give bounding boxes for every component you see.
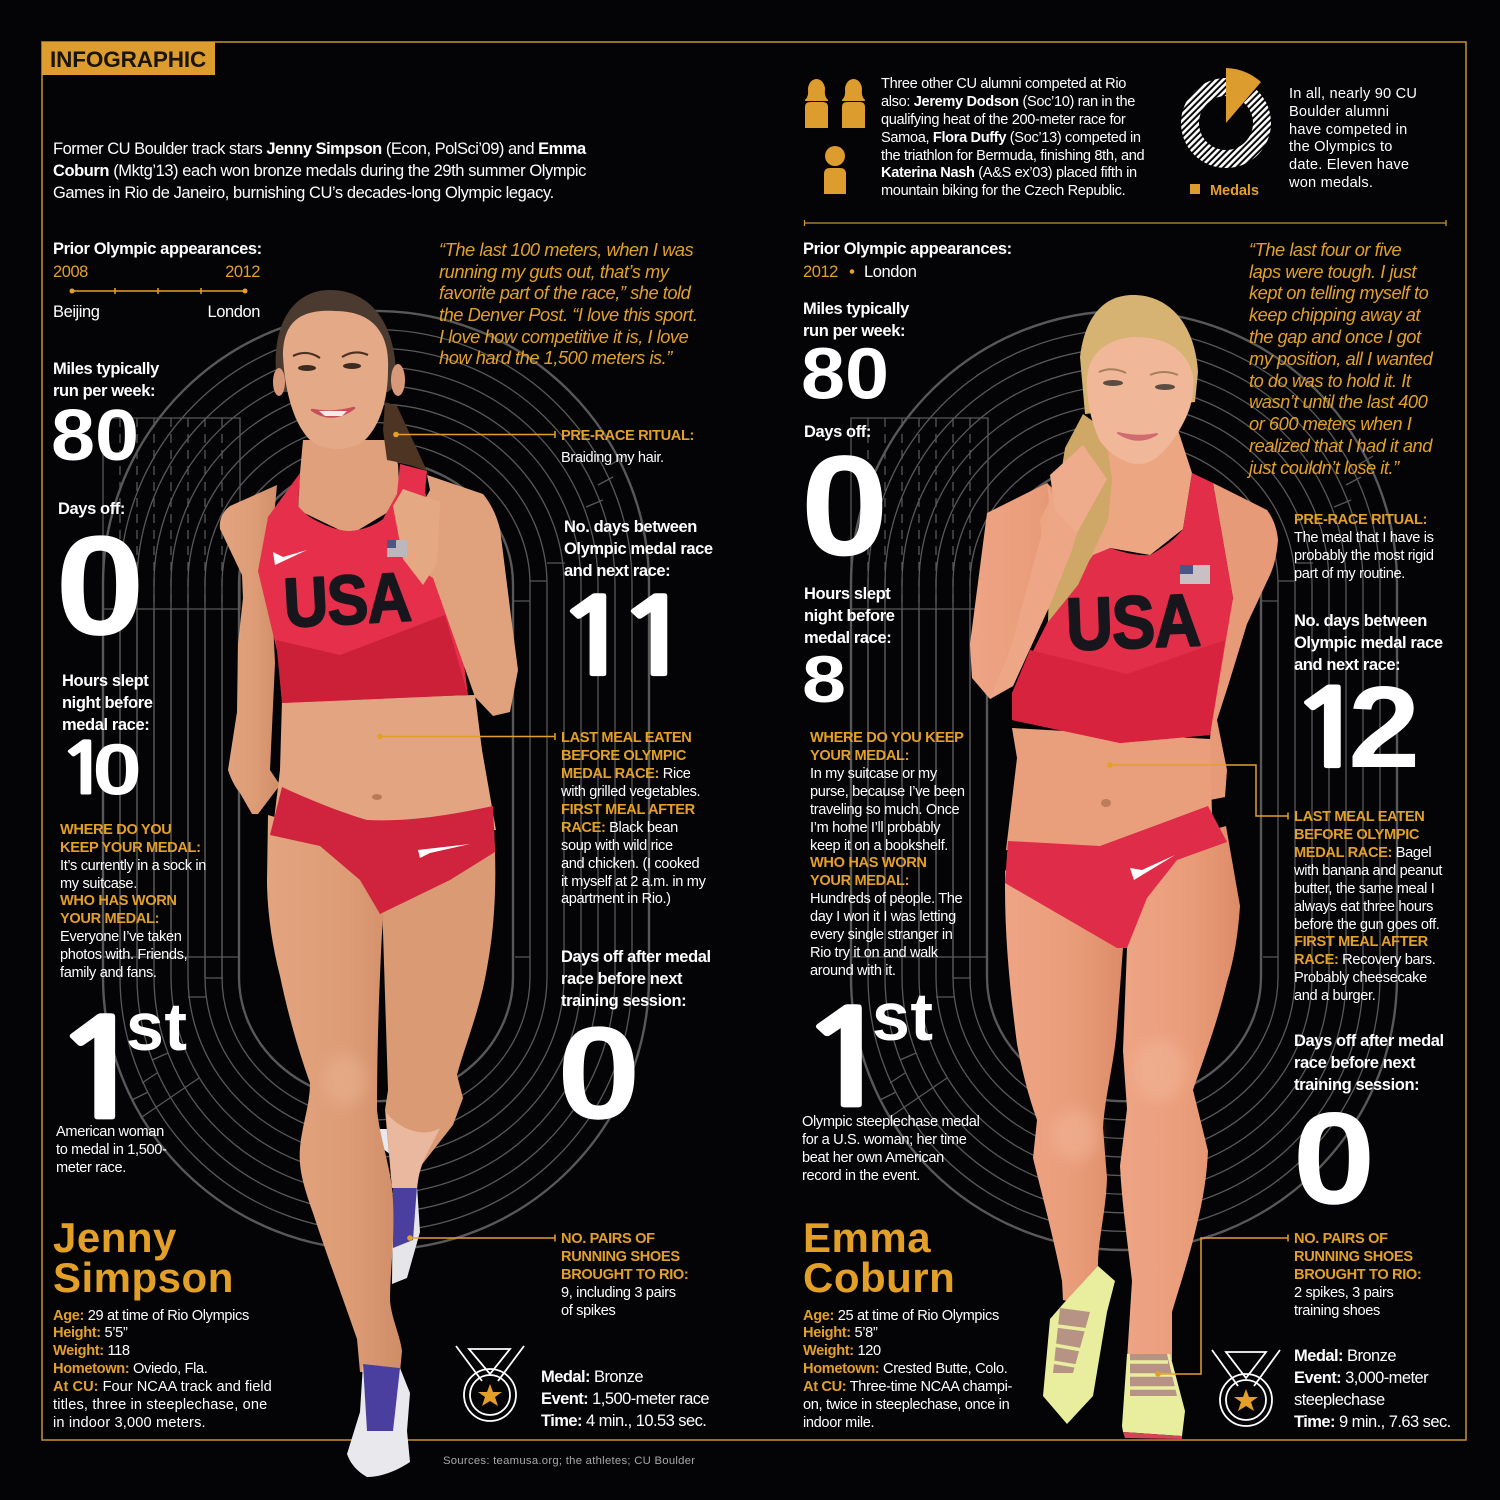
- callout: Emma last meal: always eat three hours: [1294, 899, 1433, 915]
- callout: Jenny running shoes: BROUGHT TO RIO:: [561, 1267, 688, 1283]
- where do you keep your medal: YOUR MEDAL:: [60, 911, 159, 927]
- first steeplechase medal: record in the event.: [802, 1168, 920, 1184]
- miles per week: 80: [801, 334, 889, 415]
- infographic tag: [42, 42, 215, 75]
- prior appearances: 2008: [53, 263, 88, 281]
- bio: Hometown: Crested Butte, Colo.: [803, 1361, 1007, 1377]
- quote: Jenny: “The last 100 meters, when I was: [439, 239, 694, 260]
- stat: days between races: No. days between: [564, 518, 697, 536]
- callout: Emma last meal: BEFORE OLYMPIC: [1294, 827, 1420, 843]
- stat: days between races: and next race:: [564, 562, 670, 580]
- where do you keep your medal: KEEP YOUR MEDAL:: [60, 840, 201, 856]
- quote: Emma: kept on telling myself to: [1249, 282, 1429, 303]
- text: three other alumni: Three other CU alumni competed at Rio: [881, 76, 1126, 92]
- stat: days between races: No. days between: [1294, 612, 1427, 630]
- quote: Emma: realized that I had it and: [1249, 435, 1433, 456]
- first steeplechase medal: 1: [795, 994, 900, 1126]
- bio: in indoor 3,000 meters.: [53, 1415, 206, 1431]
- name: Jenny Simpson: Simpson: [53, 1254, 234, 1301]
- medal details: Emma: Time: 9 min., 7.63 sec.: [1294, 1413, 1451, 1431]
- callout: Emma last meal: and a burger.: [1294, 988, 1375, 1004]
- name: Emma Coburn: Emma: [803, 1214, 931, 1261]
- callout: Jenny pre-race ritual: PRE-RACE RITUAL:: [561, 428, 694, 444]
- callout: Jenny last meal: it myself at 2 a.m. in my: [561, 874, 707, 890]
- bio: Age: 25 at time of Rio Olympics: [803, 1308, 999, 1324]
- hours slept: [57, 672, 153, 811]
- miles per week: [51, 360, 160, 476]
- first American woman: American woman: [56, 1124, 164, 1140]
- text: three other alumni: qualifying heat of the 200-meter race for: [881, 112, 1126, 128]
- where do you keep your medal: WHO HAS WORN: [60, 893, 177, 909]
- where do you keep your medal: around with it.: [810, 963, 896, 979]
- callout: Emma running shoes: [1155, 1231, 1425, 1377]
- where do you keep your medal: purse, because I’ve been: [810, 784, 965, 800]
- callout: Emma running shoes: BROUGHT TO RIO:: [1294, 1267, 1421, 1283]
- hours slept: night before: [804, 607, 895, 625]
- icon: medal, Emma: [1212, 1350, 1280, 1426]
- callout: Emma last meal: LAST MEAL EATEN: [1294, 809, 1424, 825]
- stat: days off after race: 0: [557, 999, 641, 1146]
- donut chart: medals share: [1181, 68, 1271, 199]
- where do you keep your medal: my suitcase.: [60, 876, 137, 892]
- callout: Jenny last meal: soup with wild rice: [561, 838, 673, 854]
- callout: Emma last meal: RACE: Recovery bars.: [1294, 952, 1435, 968]
- text: three other alumni: Katerina Nash (A&S ex’03) placed fifth in: [881, 165, 1137, 181]
- quote: Emma: keep chipping away at: [1249, 304, 1421, 325]
- text: all alumni: Boulder alumni: [1289, 104, 1389, 120]
- callout: Jenny running shoes: [407, 1231, 692, 1319]
- where do you keep your medal: every single stranger in: [810, 927, 953, 943]
- track diagram: Jenny: [103, 311, 649, 1250]
- first steeplechase medal: for a U.S. woman; her time: [802, 1132, 967, 1148]
- bio: At CU: Four NCAA track and field: [53, 1379, 272, 1395]
- stat: days between races: 1: [553, 586, 637, 691]
- callout: Jenny last meal: and chicken. (I cooked: [561, 856, 700, 872]
- stat: days off after race: [1292, 1032, 1444, 1231]
- stat: days between races: 1: [614, 586, 698, 691]
- bio: At CU: Three-time NCAA champi-: [803, 1379, 1012, 1395]
- prior appearances: London: [208, 303, 260, 321]
- days off: 0: [55, 507, 145, 665]
- where do you keep your medal: YOUR MEDAL:: [810, 748, 909, 764]
- text: all alumni: In all, nearly 90 CU: [1289, 86, 1417, 102]
- first steeplechase medal: beat her own American: [802, 1150, 944, 1166]
- callout: Jenny last meal: BEFORE OLYMPIC: [561, 748, 687, 764]
- quote: Jenny: how hard the 1,500 meters is.”: [439, 347, 673, 368]
- prior appearances: 2012: [803, 263, 838, 281]
- quote: Jenny: I love how competitive it is, I love: [439, 326, 689, 347]
- days off: Days off:: [58, 500, 125, 518]
- stat: days off after race: race before next: [561, 970, 683, 988]
- days off: 0: [800, 426, 889, 586]
- prior appearances: London: [864, 263, 917, 281]
- intro text: Former CU Boulder track stars Jenny Simpson (Econ, PolSci’09) and Emma: [53, 140, 586, 158]
- where do you keep your medal: WHERE DO YOU KEEP: [810, 730, 964, 746]
- stat: days off after race: training session:: [1294, 1076, 1419, 1094]
- callout: Emma pre-race ritual: probably the most rigid: [1294, 548, 1434, 564]
- callout: Emma running shoes: RUNNING SHOES: [1294, 1249, 1413, 1265]
- bio: titles, three in steeplechase, one: [53, 1397, 267, 1413]
- prior appearances: [803, 240, 1012, 281]
- name: Emma Coburn: Coburn: [803, 1254, 955, 1301]
- text: three other alumni: the triathlon for Bermuda, finishing 8th, and: [881, 148, 1145, 164]
- callout: Jenny running shoes: NO. PAIRS OF: [561, 1231, 655, 1247]
- hours slept: 1: [57, 734, 111, 805]
- bio: indoor mile.: [803, 1415, 874, 1431]
- first steeplechase medal: st: [872, 979, 933, 1055]
- hours slept: 0: [92, 730, 142, 811]
- callout: Jenny last meal: [377, 730, 709, 907]
- jersey lettering: USA: USA: [282, 558, 412, 642]
- jersey lettering: USA: USA: [1065, 578, 1201, 666]
- bio: Weight: 120: [803, 1343, 881, 1359]
- callout: Jenny last meal: MEDAL RACE: Rice: [561, 766, 691, 782]
- text: three other alumni: mountain biking for the Czech Republic.: [881, 183, 1125, 199]
- text: all alumni: the Olympics to: [1289, 139, 1393, 155]
- quote: Emma: the gap and once I got: [1249, 326, 1422, 347]
- stat: days between races: [1287, 612, 1443, 792]
- medal details: Jenny: Event: 1,500-meter race: [541, 1390, 709, 1408]
- where do you keep your medal: photos with. Friends,: [60, 947, 187, 963]
- first American woman: meter race.: [56, 1160, 126, 1176]
- stat: days off after race: training session:: [561, 992, 686, 1010]
- prior appearances: Prior Olympic appearances:: [53, 240, 262, 258]
- first American woman: 1: [49, 1004, 153, 1139]
- callout: Emma running shoes: training shoes: [1294, 1303, 1380, 1319]
- quote: Emma: just couldn’t lose it.”: [1246, 457, 1400, 478]
- bio: Age: 29 at time of Rio Olympics: [53, 1308, 249, 1324]
- where do you keep your medal: keep it on a bookshelf.: [810, 838, 948, 854]
- stat: days off after race: Days off after medal: [1294, 1032, 1444, 1050]
- medal details: Jenny: Medal: Bronze: [541, 1368, 643, 1386]
- callout: Jenny running shoes: 9, including 3 pairs: [561, 1285, 676, 1301]
- callout: Jenny last meal: RACE: Black bean: [561, 820, 678, 836]
- icon: medal, Jenny: [456, 1346, 524, 1421]
- where do you keep your medal: YOUR MEDAL:: [810, 873, 909, 889]
- hours slept: 8: [802, 643, 846, 716]
- callout: Jenny last meal: FIRST MEAL AFTER: [561, 802, 696, 818]
- callout: Emma running shoes: NO. PAIRS OF: [1294, 1231, 1388, 1247]
- stat: days off after race: Days off after medal: [561, 948, 711, 966]
- bio: Weight: 118: [53, 1343, 130, 1359]
- stat: days between races: 1: [1287, 676, 1371, 783]
- where do you keep your medal: traveling so much. Once: [810, 802, 960, 818]
- days off: Days off:: [804, 423, 871, 441]
- miles per week: Miles typically: [803, 300, 910, 318]
- medal details: Jenny: Time: 4 min., 10.53 sec.: [541, 1412, 706, 1430]
- stat: days off after race: [557, 948, 711, 1146]
- medal details: Emma: steeplechase: [1294, 1391, 1385, 1409]
- bio: Height: 5’5”: [53, 1325, 127, 1341]
- callout: Emma last meal: Probably cheesecake: [1294, 970, 1427, 986]
- callout: Jenny running shoes: of spikes: [561, 1303, 615, 1319]
- where do you keep your medal: I’m home I’ll probably: [810, 820, 941, 836]
- callout: Emma last meal: before the gun goes off.: [1294, 917, 1440, 933]
- quote: Emma: wasn’t until the last 400: [1249, 391, 1429, 412]
- where do you keep your medal: WHERE DO YOU: [60, 822, 171, 838]
- quote: Emma: laps were tough. I just: [1249, 261, 1417, 282]
- hours slept: medal race:: [62, 716, 149, 734]
- miles per week: run per week:: [803, 322, 905, 340]
- hours slept: night before: [62, 694, 153, 712]
- first steeplechase medal: Olympic steeplechase medal: [802, 1114, 980, 1130]
- first American woman: [49, 989, 187, 1176]
- stat: days between races: and next race:: [1294, 656, 1400, 674]
- callout: Jenny pre-race ritual: [393, 428, 694, 466]
- hours slept: Hours slept: [804, 585, 891, 603]
- quote: Emma: “The last four or five: [1249, 239, 1402, 260]
- prior appearances: 2012: [225, 263, 260, 281]
- text: all alumni: date. Eleven have: [1289, 157, 1409, 173]
- text: three other alumni: Samoa, Flora Duffy (Soc’13) competed in: [881, 130, 1141, 146]
- text: all alumni: have competed in: [1289, 122, 1407, 138]
- callout: Jenny last meal: LAST MEAL EATEN: [561, 730, 691, 746]
- medal details: Emma: Medal: Bronze: [1294, 1347, 1396, 1365]
- callout: Emma pre-race ritual: The meal that I have is: [1294, 530, 1434, 546]
- bio: Height: 5’8”: [803, 1325, 877, 1341]
- text: three other alumni: also: Jeremy Dodson (Soc’10) ran in the: [881, 94, 1135, 110]
- miles per week: [801, 300, 910, 415]
- sources: Sources: teamusa.org; the athletes; CU Boulder: [443, 1455, 695, 1467]
- stat: days off after race: 0: [1292, 1085, 1376, 1231]
- where do you keep your medal: family and fans.: [60, 965, 157, 981]
- first steeplechase medal: [795, 979, 980, 1184]
- miles per week: 80: [51, 395, 139, 476]
- where do you keep your medal: It’s currently in a sock in: [60, 858, 206, 874]
- where do you keep your medal: Hundreds of people. The: [810, 891, 963, 907]
- bio: Hometown: Oviedo, Fla.: [53, 1361, 207, 1377]
- text: all alumni: won medals.: [1288, 175, 1373, 191]
- where do you keep your medal: Everyone I’ve taken: [60, 929, 182, 945]
- intro text: Games in Rio de Janeiro, burnishing CU’s decades-long Olympic legacy.: [53, 184, 554, 202]
- callout: Emma last meal: [1107, 762, 1446, 1004]
- intro text: Coburn (Mktg’13) each won bronze medals during the 29th summer Olympic: [53, 162, 586, 180]
- where do you keep your medal: day I won it I was letting: [810, 909, 956, 925]
- athlete photo: Emma Coburn: [970, 295, 1278, 1439]
- prior appearances: Prior Olympic appearances:: [803, 240, 1012, 258]
- callout: Emma pre-race ritual: PRE-RACE RITUAL:: [1294, 512, 1427, 528]
- hours slept: [802, 585, 895, 716]
- first American woman: st: [126, 989, 187, 1065]
- callout: Emma last meal: FIRST MEAL AFTER: [1294, 934, 1429, 950]
- callout: Emma last meal: butter, the same meal I: [1294, 881, 1434, 897]
- stat: days between races: [553, 518, 713, 691]
- quote: Emma: or 600 meters when I: [1249, 413, 1412, 434]
- prior appearances: [53, 240, 262, 321]
- where do you keep your medal: WHO HAS WORN: [810, 855, 927, 871]
- bio: on, twice in steeplechase, once in: [803, 1397, 1010, 1413]
- quote: Emma: to do was to hold it. It: [1249, 370, 1412, 391]
- where do you keep your medal: Rio try it on and walk: [810, 945, 939, 961]
- callout: Jenny pre-race ritual: Braiding my hair.: [561, 450, 664, 466]
- track diagram: Emma: [851, 311, 1397, 1250]
- infographic tag: INFOGRAPHIC: [50, 47, 206, 72]
- callout: Emma last meal: with banana and peanut: [1293, 863, 1442, 879]
- callout: Emma last meal: MEDAL RACE: Bagel: [1294, 845, 1431, 861]
- stat: days between races: 2: [1348, 663, 1420, 792]
- athlete photo: Jenny Simpson: [220, 290, 518, 1477]
- callout: Jenny running shoes: RUNNING SHOES: [561, 1249, 680, 1265]
- callout: Emma pre-race ritual: part of my routine.: [1294, 566, 1405, 582]
- prior appearances: Beijing: [53, 303, 100, 321]
- stat: days between races: Olympic medal race: [564, 540, 713, 558]
- panel: Emma Coburn stats: [795, 240, 1016, 1431]
- where do you keep your medal: In my suitcase or my: [810, 766, 938, 782]
- first American woman: to medal in 1,500-: [56, 1142, 167, 1158]
- icon group: three alumni: [805, 79, 865, 194]
- medal details: Emma: Event: 3,000-meter: [1294, 1369, 1428, 1387]
- panel: Jenny Simpson stats: [49, 240, 276, 1431]
- hours slept: medal race:: [804, 629, 891, 647]
- quote: Jenny: running my guts out, that’s my: [439, 261, 671, 282]
- stat: days off after race: race before next: [1294, 1054, 1416, 1072]
- callout: Jenny last meal: apartment in Rio.): [561, 891, 671, 907]
- miles per week: Miles typically: [53, 360, 160, 378]
- callout: Jenny last meal: with grilled vegetables.: [560, 784, 700, 800]
- donut chart: medals share: Medals: [1210, 183, 1259, 199]
- miles per week: run per week:: [53, 382, 155, 400]
- stat: days between races: Olympic medal race: [1294, 634, 1443, 652]
- name: Jenny Simpson: Jenny: [53, 1214, 177, 1261]
- hours slept: Hours slept: [62, 672, 149, 690]
- quote: Jenny: favorite part of the race,” she told: [439, 282, 692, 303]
- callout: Emma running shoes: 2 spikes, 3 pairs: [1294, 1285, 1394, 1301]
- quote: Emma: my position, all I wanted: [1249, 348, 1434, 369]
- quote: Jenny: the Denver Post. “I love this sport.: [439, 304, 697, 325]
